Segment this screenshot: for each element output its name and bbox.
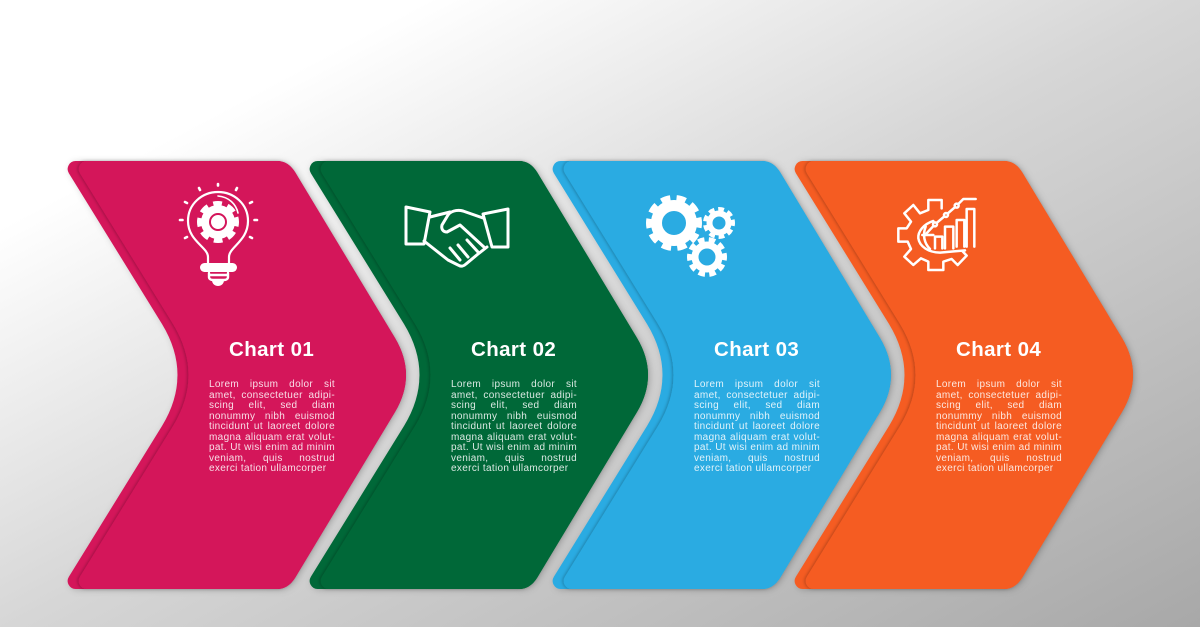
chevron: crimson arrow with icon xyxy=(67,158,411,593)
text block: chart 01: veniam, quis nostrud xyxy=(209,453,335,464)
text block: chart 02: pat. Ut wisi enim ad minim xyxy=(451,442,577,453)
panel: chart 04 xyxy=(794,158,1138,592)
text block: chart 03: amet, consectetuer adipi- xyxy=(694,390,820,401)
text block: chart 02: amet, consectetuer adipi- xyxy=(451,390,577,401)
text block: chart 04: pat. Ut wisi enim ad minim xyxy=(936,442,1062,453)
text block: chart 03: Lorem ipsum dolor sit xyxy=(694,379,820,390)
text block: chart 01: pat. Ut wisi enim ad minim xyxy=(209,442,335,453)
text block: chart 01: magna aliquam erat volut- xyxy=(209,432,335,443)
text block: chart 01: exerci tation ullamcorper xyxy=(209,463,326,474)
text block: chart 02: Lorem ipsum dolor sit xyxy=(451,379,577,390)
text block: chart 04: tincidunt ut laoreet dolore xyxy=(936,421,1062,432)
heading: chart 03: Chart 03 xyxy=(714,338,799,361)
text block: chart 04 xyxy=(936,379,1062,474)
text block: chart 01 xyxy=(209,379,335,474)
icon: three gears xyxy=(649,198,733,274)
text block: chart 04: Lorem ipsum dolor sit xyxy=(936,379,1062,390)
text block: chart 04: exerci tation ullamcorper xyxy=(936,463,1053,474)
icon: light bulb with gear xyxy=(180,184,257,286)
text block: chart 02: magna aliquam erat volut- xyxy=(451,432,577,443)
text block: chart 03: exerci tation ullamcorper xyxy=(694,463,811,474)
text block: chart 03: magna aliquam erat volut- xyxy=(694,432,820,443)
text block: chart 03: pat. Ut wisi enim ad minim xyxy=(694,442,820,453)
text block: chart 03: scing elit, sed diam xyxy=(694,400,820,411)
text block: chart 02 xyxy=(451,379,577,474)
text block: chart 01: scing elit, sed diam xyxy=(209,400,335,411)
text block: chart 03: nonummy nibh euismod xyxy=(694,411,820,422)
panel: chart 02 xyxy=(309,158,652,593)
icon: gear with growth chart xyxy=(898,199,976,270)
text block: chart 04: scing elit, sed diam xyxy=(936,400,1062,411)
chevron: blue arrow with icon xyxy=(552,158,896,592)
text block: chart 04: veniam, quis nostrud xyxy=(936,453,1062,464)
text block: chart 04: nonummy nibh euismod xyxy=(936,411,1062,422)
heading: chart 02: Chart 02 xyxy=(471,338,556,361)
heading: chart 01: Chart 01 xyxy=(229,338,314,361)
text block: chart 04: amet, consectetuer adipi- xyxy=(936,390,1062,401)
text block: chart 01: Lorem ipsum dolor sit xyxy=(209,379,335,390)
text block: chart 03: veniam, quis nostrud xyxy=(694,453,820,464)
text block: chart 02: tincidunt ut laoreet dolore xyxy=(451,421,577,432)
text block: chart 02: exerci tation ullamcorper xyxy=(451,463,568,474)
text block: chart 01: tincidunt ut laoreet dolore xyxy=(209,421,335,432)
chevron: orange arrow with icon xyxy=(794,158,1138,592)
panel: chart 01 xyxy=(67,158,411,593)
text block: chart 02: veniam, quis nostrud xyxy=(451,453,577,464)
text block: chart 01: amet, consectetuer adipi- xyxy=(209,390,335,401)
chevron: green arrow with icon xyxy=(309,158,652,593)
text block: chart 01: nonummy nibh euismod xyxy=(209,411,335,422)
text block: chart 04: magna aliquam erat volut- xyxy=(936,432,1062,443)
text block: chart 03 xyxy=(694,379,820,474)
text block: chart 02: scing elit, sed diam xyxy=(451,400,577,411)
heading: chart 04: Chart 04 xyxy=(956,338,1041,361)
icon: handshake xyxy=(406,207,508,266)
panel: chart 03 xyxy=(552,158,896,592)
text block: chart 02: nonummy nibh euismod xyxy=(451,411,577,422)
text block: chart 03: tincidunt ut laoreet dolore xyxy=(694,421,820,432)
